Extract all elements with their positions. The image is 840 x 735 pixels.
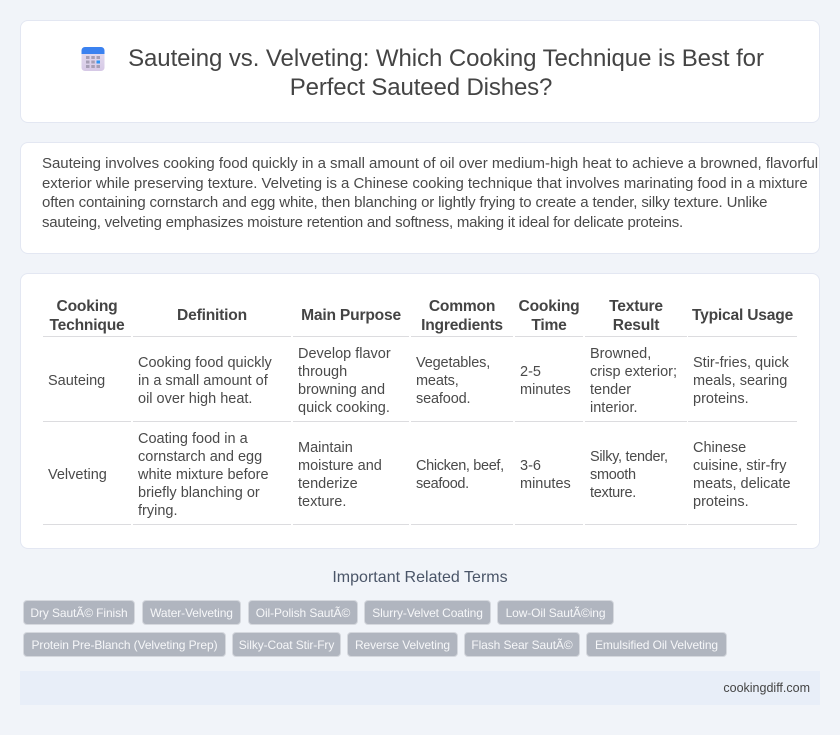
- table header: Common Ingredients: [421, 298, 503, 334]
- row: Velveting purpose: Maintain: [298, 440, 353, 456]
- row: Velveting usage: cuisine, stir-fry: [693, 458, 786, 474]
- table header: Typical Usage: Typical Usage: [692, 307, 793, 324]
- panel: header: [20, 20, 820, 123]
- row: Velveting usage: Chinese: [693, 440, 746, 456]
- tag: Dry SautÃ© Finish: [30, 606, 128, 620]
- row: Sauteing purpose: quick cooking.: [298, 400, 390, 416]
- table header: Cooking Time: [519, 298, 579, 334]
- tag: Low-Oil SautÃ©ing: [506, 606, 605, 620]
- row: Velveting texture: texture.: [590, 485, 636, 501]
- row: Velveting texture: [590, 449, 668, 501]
- row: Velveting purpose: tenderize: [298, 476, 358, 492]
- tag list: related terms: [23, 600, 727, 657]
- text block: introduction: sauteing, velveting emphasizes moisture retention and softness, making it ideal for delicate proteins.: [42, 214, 683, 230]
- panel: comparison table: [20, 273, 820, 549]
- row: Sauteing ingredients: seafood.: [416, 391, 470, 407]
- row: Velveting purpose: [298, 440, 382, 510]
- tag: Oil-Polish SautÃ©: [256, 606, 350, 620]
- tag: [364, 600, 491, 625]
- row: Sauteing usage: meals, searing: [693, 373, 787, 389]
- table header: Cooking Time: Cooking: [519, 298, 579, 315]
- row: Sauteing ingredients: meats,: [416, 373, 459, 389]
- row: Sauteing definition: [138, 355, 272, 407]
- row: Velveting texture: Silky, tender,: [590, 449, 668, 465]
- row: Sauteing purpose: [298, 346, 391, 416]
- footer bar: [20, 671, 820, 705]
- tag: [23, 632, 226, 657]
- heading: Important Related Terms: Important Related Terms: [332, 569, 508, 586]
- row: Velveting ingredients: Chicken, beef,: [416, 458, 504, 474]
- row: Sauteing texture: tender: [590, 382, 631, 398]
- row: Velveting definition: cornstarch and egg: [138, 449, 262, 465]
- title: Sauteing vs. Velveting: Which Cooking Technique is Best for: [128, 45, 764, 72]
- tag: Silky-Coat Stir-Fry: [239, 638, 334, 652]
- tag: Flash Sear SautÃ©: [471, 638, 573, 652]
- row: Sauteing purpose: Develop flavor: [298, 346, 391, 362]
- tag: [464, 632, 580, 657]
- row: Sauteing usage: [693, 355, 789, 407]
- row: Sauteing texture: crisp exterior;: [590, 364, 677, 380]
- row: Sauteing definition: oil over high heat.: [138, 391, 252, 407]
- row: Sauteing texture: interior.: [590, 400, 638, 416]
- tag: [497, 600, 614, 625]
- tag: [347, 632, 458, 657]
- title: [128, 45, 764, 101]
- row: Sauteing texture: [590, 346, 677, 416]
- table header: Texture Result: Texture: [609, 298, 663, 315]
- row: Velveting definition: [138, 431, 269, 519]
- row: Sauteing technique: Sauteing: [48, 373, 105, 389]
- table header: Cooking Time: Time: [531, 317, 567, 334]
- row: Sauteing texture: Browned,: [590, 346, 651, 362]
- text block: introduction: [42, 155, 818, 230]
- tag: [248, 600, 358, 625]
- text block: introduction: Sauteing involves cooking food quickly in a small amount of oil over medium-high heat to achieve a browned, flavorful: [42, 155, 818, 172]
- row: Velveting technique: Velveting: [48, 467, 107, 483]
- row: Velveting definition: frying.: [138, 503, 178, 519]
- row: Velveting definition: white mixture before: [138, 467, 269, 483]
- panel: introduction: [20, 142, 820, 254]
- row: Sauteing definition: in a small amount of: [138, 373, 268, 389]
- row: Velveting time: [520, 458, 571, 492]
- row: Velveting definition: Coating food in a: [138, 431, 248, 447]
- tag: [23, 600, 135, 625]
- table header: Common Ingredients: Common: [429, 298, 495, 315]
- icon: calendar: [82, 47, 104, 71]
- row: Sauteing usage: proteins.: [693, 391, 749, 407]
- row: Velveting purpose: texture.: [298, 494, 346, 510]
- tag: Water-Velveting: [150, 606, 233, 620]
- row: Sauteing ingredients: Vegetables,: [416, 355, 490, 371]
- table header: Texture Result: [609, 298, 663, 334]
- row: Velveting definition: briefly blanching or: [138, 485, 260, 501]
- row: Velveting time: 3-6: [520, 458, 541, 474]
- title: Perfect Sauteed Dishes?: [290, 74, 552, 101]
- tag: Slurry-Velvet Coating: [372, 606, 483, 620]
- row: Velveting time: minutes: [520, 476, 571, 492]
- tag: [586, 632, 727, 657]
- row: Sauteing ingredients: [416, 355, 490, 407]
- row: Velveting usage: [693, 440, 791, 510]
- row: Velveting usage: proteins.: [693, 494, 749, 510]
- row: Sauteing purpose: browning and: [298, 382, 385, 398]
- row: Velveting texture: smooth: [590, 467, 636, 483]
- text block: introduction: exterior while preserving texture. Velveting is a Chinese cooking technique that involves marinating food in a mixture: [42, 174, 808, 192]
- tag: Emulsified Oil Velveting: [595, 638, 718, 652]
- row: Sauteing time: [520, 364, 571, 398]
- tag: Reverse Velveting: [355, 638, 450, 652]
- table header: Common Ingredients: Ingredients: [421, 317, 503, 334]
- row: Sauteing time: minutes: [520, 382, 571, 398]
- text block: introduction: often containing cornstarch and egg white, then blanching or lightly frying to create a tender, silky texture. Unlike: [42, 194, 767, 211]
- row: Sauteing definition: Cooking food quickly: [138, 355, 272, 371]
- tag: [232, 632, 341, 657]
- table header: Cooking Technique: Cooking: [57, 298, 117, 315]
- row: Velveting purpose: moisture and: [298, 458, 382, 474]
- table header: Texture Result: Result: [613, 317, 659, 334]
- tag: Protein Pre-Blanch (Velveting Prep): [32, 638, 217, 652]
- table header: Cooking Technique: Technique: [49, 317, 125, 334]
- row: Velveting usage: meats, delicate: [693, 476, 791, 492]
- row: Sauteing usage: Stir-fries, quick: [693, 355, 789, 371]
- tag: [142, 600, 241, 625]
- row: Velveting ingredients: [416, 458, 504, 492]
- row: Sauteing time: 2-5: [520, 364, 541, 380]
- footer text: cookingdiff.com: cookingdiff.com: [723, 681, 810, 695]
- table header: Cooking Technique: [49, 298, 125, 334]
- row: Velveting ingredients: seafood.: [416, 476, 469, 492]
- table header: Main Purpose: Main Purpose: [301, 307, 401, 324]
- row: Sauteing purpose: through: [298, 364, 347, 380]
- table header: Definition: Definition: [177, 307, 247, 324]
